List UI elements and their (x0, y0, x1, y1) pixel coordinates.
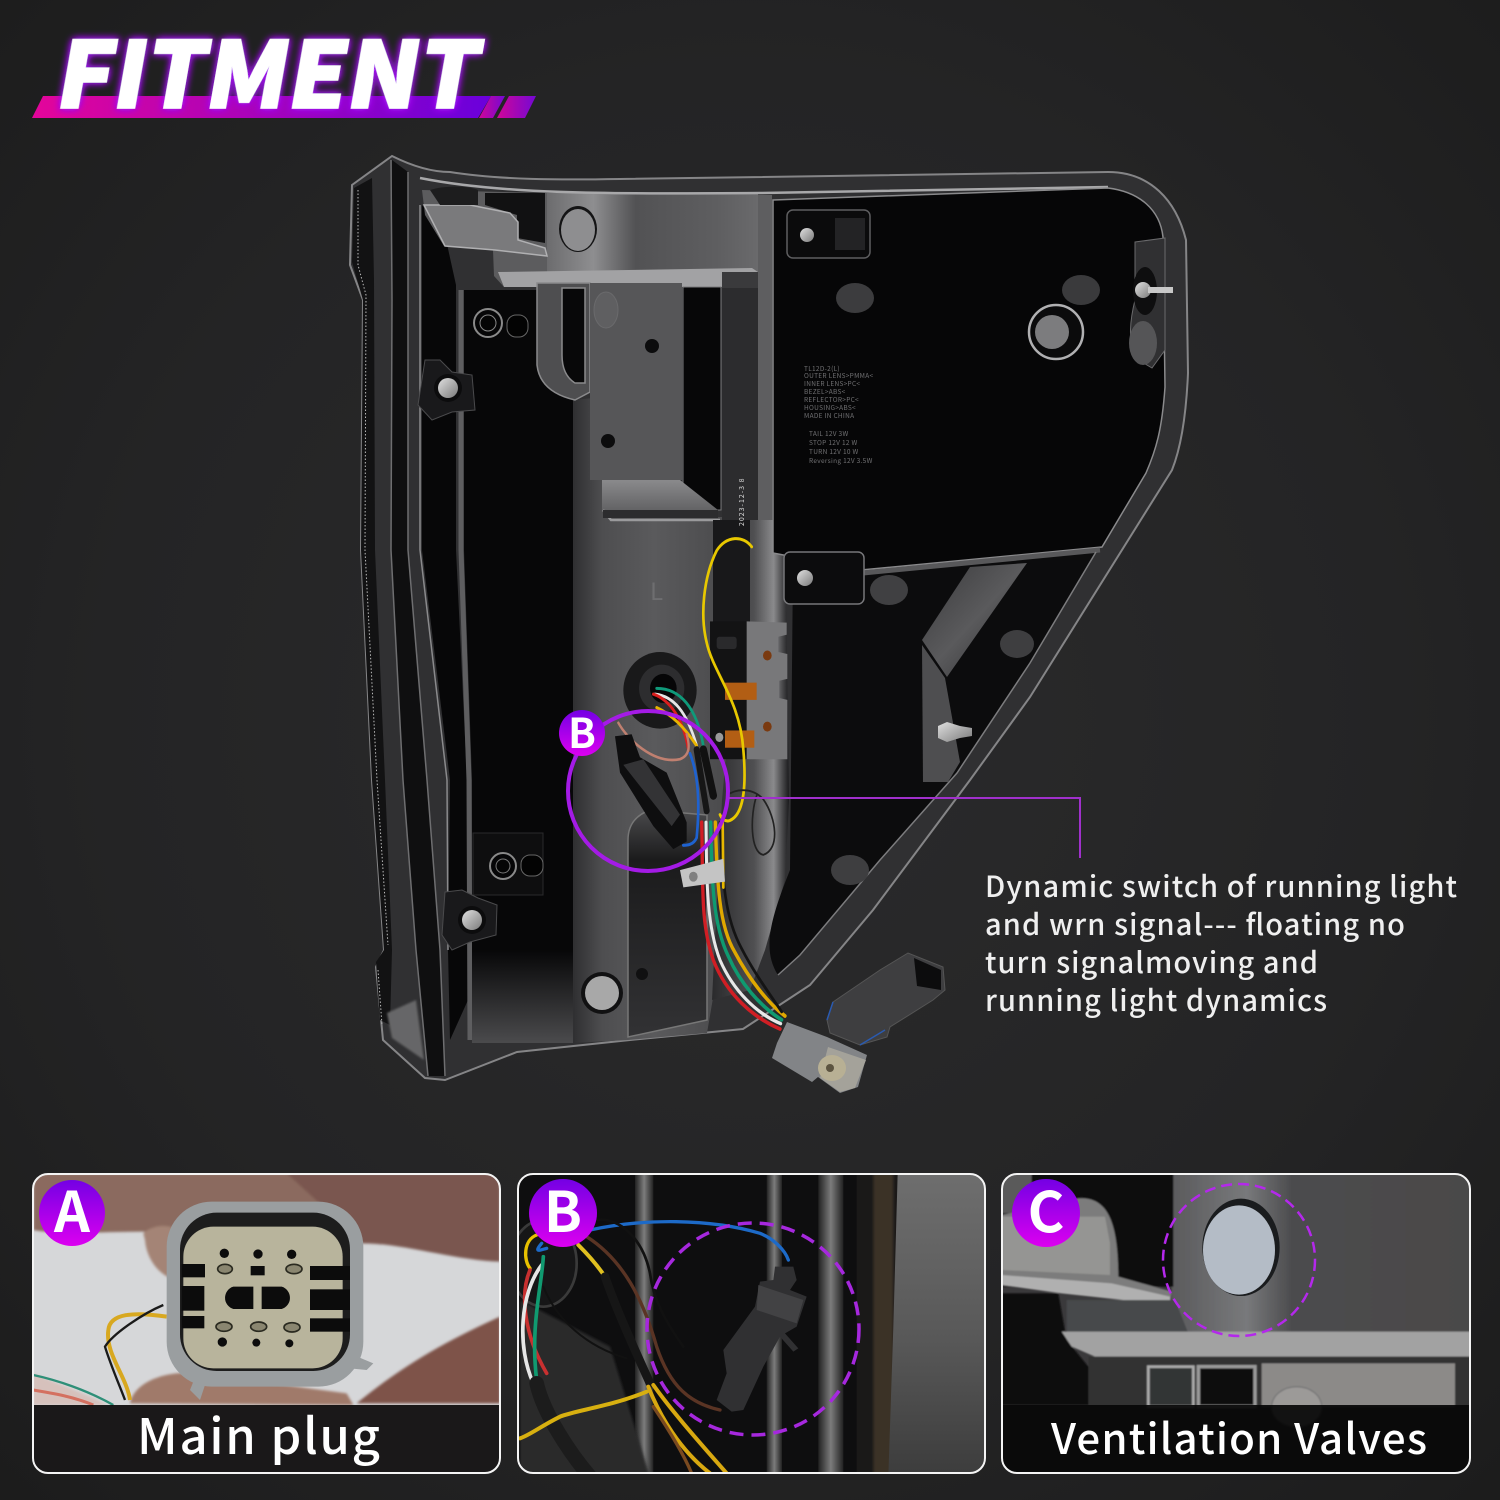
caption: Main plug: Main plug (137, 1398, 380, 1469)
left black column (464, 290, 573, 1043)
metal bracket (710, 621, 787, 759)
date stamp: 2023-12-3 8 (737, 477, 747, 526)
column bottom fade (472, 950, 573, 1043)
relay bracket, wiring and connectors (615, 539, 787, 1029)
callout: B highlight circle (568, 711, 728, 871)
upper post (474, 309, 528, 337)
badge B (529, 1168, 597, 1249)
upper black panel (773, 188, 1165, 570)
panel C dashed highlight (1163, 1184, 1315, 1336)
background strips (520, 1173, 987, 1477)
valve (1202, 1199, 1280, 1296)
moulded label text: TURN 12V 10 W (809, 446, 859, 456)
grey vertical rib (712, 195, 789, 1000)
moulded label text (804, 363, 873, 465)
moulded label text: STOP 12V 12 W (809, 437, 858, 447)
lower black panel (769, 552, 1096, 975)
moulded label text: OUTER LENS>PMMA< (804, 370, 873, 380)
plug body (167, 1202, 373, 1400)
callout description text (985, 864, 1458, 1020)
moulded label text: HOUSING>ABS< (804, 402, 856, 412)
wire harness (702, 822, 785, 1029)
centre grey column (537, 283, 747, 1043)
title text: FITMENT (48, 1, 494, 135)
callout leader line (728, 798, 1080, 858)
badge A (39, 1168, 105, 1249)
panel A border (33, 1174, 500, 1473)
panel A photo (33, 1173, 500, 1473)
vent valve: top band (559, 206, 597, 252)
vent valves and mesh pads (581, 275, 1100, 1014)
callout description text: running light dynamics (985, 978, 1327, 1020)
lens edge strips (352, 160, 470, 1076)
badge B: B (544, 1168, 582, 1249)
plug terminals (216, 1264, 302, 1332)
panel C photo (1002, 1173, 1472, 1475)
coloured wires (33, 1305, 167, 1405)
caption: Ventilation Valves: Ventilation Valves (1050, 1406, 1427, 1467)
mounting tabs (418, 210, 1173, 950)
grey main connector (772, 1022, 867, 1093)
angled grey rib (922, 563, 1027, 782)
moulded label text: MADE IN CHINA (804, 410, 854, 420)
callout description text: turn signalmoving and (985, 940, 1318, 982)
housing shapes (1002, 1173, 1472, 1427)
small black connector (717, 1267, 807, 1412)
moulded letter L: L (650, 572, 663, 607)
panel B: dynamic switch connector (510, 1168, 987, 1477)
moulded label text: Reversing 12V 3.5W (809, 455, 873, 465)
badge C: C (1028, 1168, 1064, 1249)
product photo: tail light back housing (350, 156, 1188, 1093)
moulded label text: INNER LENS>PC< (804, 378, 860, 388)
title underline bar (32, 96, 536, 118)
badge B on photo: B (568, 700, 596, 760)
panel B photo (510, 1173, 987, 1477)
cable clamp (680, 859, 725, 887)
callout description text: Dynamic switch of running light (985, 864, 1458, 906)
moulded label text: BEZEL>ABS< (804, 386, 846, 396)
wires from grommet (618, 539, 775, 855)
fingers (33, 1173, 500, 1405)
grommet (519, 1222, 578, 1308)
moulded label text: TL12D-2(L) (804, 363, 840, 373)
inline black connector (615, 734, 687, 849)
top grey band (420, 178, 1108, 287)
panel A: main plug (33, 1168, 500, 1473)
black connector (827, 953, 945, 1045)
badge B on photo (559, 700, 605, 760)
panel C border (1002, 1174, 1470, 1473)
diagonal inner highlight (778, 552, 1096, 975)
panel B wires (520, 1220, 788, 1477)
panel edge rib line (863, 550, 1100, 573)
housing silhouette (350, 156, 1188, 1080)
moulded label text: REFLECTOR>PC< (804, 394, 859, 404)
moulded label text: TAIL 12V 3W (809, 428, 848, 438)
plug slots (182, 1249, 350, 1347)
faint ring under caption (1020, 1418, 1077, 1475)
lower inset panel (628, 810, 707, 1037)
panel C: ventilation valves (1002, 1168, 1472, 1475)
title: FITMENT banner (32, 1, 536, 135)
callout description text: and wrn signal--- floating no (985, 902, 1405, 944)
badge A: A (53, 1168, 91, 1249)
rubber grommet (623, 652, 697, 729)
badge C (1012, 1168, 1080, 1249)
rear plate with post (473, 833, 543, 895)
panel B dashed highlight (647, 1223, 859, 1435)
panel B border (518, 1174, 985, 1473)
